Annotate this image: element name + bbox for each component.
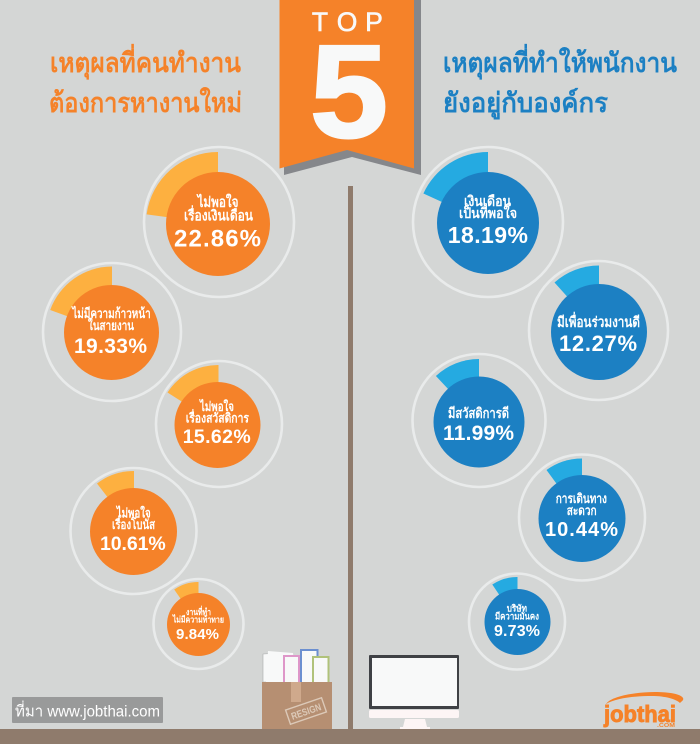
left stat 1: salary 22.86% [144,147,294,297]
right stat 1: satisfying salary 18.19%: เป็นที่พอใจ [459,203,517,221]
right stat 4: convenient commute 10.44%: 10.44% [545,519,618,541]
right stat 1: satisfying salary 18.19% [413,147,563,297]
right stat 4: convenient commute 10.44%: สะดวก [567,503,597,518]
left stat 3: welfare 15.62% [156,361,282,487]
left stat 1: salary 22.86%: 22.86% [174,226,261,252]
left stat 3: welfare 15.62%: ไม่พอใจ [199,398,234,414]
banner word TOP [312,7,383,37]
right stat 5: stable company 9.73% [469,574,565,670]
left stat 4: bonus 10.61%: ไม่พอใจ [115,505,151,521]
banner word TOP: O [337,7,357,37]
icon: resignation box: RESIGN [290,702,323,723]
ground strip [0,729,700,744]
logo: jobthai [603,692,683,729]
left stat 4: bonus 10.61%: 10.61% [100,533,166,555]
source label [12,697,163,723]
right stat 3: good welfare 11.99% [412,354,546,487]
right stat 4: convenient commute 10.44% [519,454,645,580]
left stat 5: unchallenging work 9.84%: ไม่มีความท้าทาย [172,614,224,625]
left stat 3: welfare 15.62%: 15.62% [183,426,251,448]
left stat 5: unchallenging work 9.84%: งานที่ทำ [186,605,211,617]
banner word TOP: T [312,7,328,37]
right stat 2: good colleagues 12.27%: 12.27% [559,331,637,356]
right stat 2: good colleagues 12.27%: มีเพื่อนร่วมงานดี [557,311,640,331]
left stat 2: career path 19.33%: ในสายงาน [88,317,135,333]
left heading: ต้องการหางานใหม่ [49,87,242,118]
left stat 2: career path 19.33%: 19.33% [74,335,147,358]
right heading: เหตุผลที่ทำให้พนักงาน [443,43,677,80]
icon: desktop monitor [369,655,459,729]
right stat 4: convenient commute 10.44%: การเดินทาง [556,491,607,506]
left stat 5: unchallenging work 9.84% [154,579,244,669]
left stat 4: bonus 10.61%: เรื่องโบนัส [112,515,155,532]
left stat 5: unchallenging work 9.84%: 9.84% [176,626,219,643]
right stat 3: good welfare 11.99%: 11.99% [443,422,514,445]
left heading [49,43,242,118]
left heading: เหตุผลที่คนทำงาน [50,43,241,80]
right stat 2: good colleagues 12.27% [529,261,668,400]
right stat 3: good welfare 11.99%: มีสวัสดิการดี [448,405,509,421]
banner word TOP: P [365,7,383,37]
banner numeral 5: 5 [310,18,388,165]
right stat 5: stable company 9.73%: บริษัท [507,604,527,615]
right stat 1: satisfying salary 18.19%: เงินเดือน [464,193,511,209]
right stat 1: satisfying salary 18.19%: 18.19% [448,222,528,248]
left stat 1: salary 22.86%: เรื่องเงินเดือน [184,204,253,224]
left stat 2: career path 19.33%: ไม่มีความก้าวหน้า [71,305,151,321]
center divider pole [348,186,353,731]
right heading [443,43,677,120]
left stat 3: welfare 15.62%: เรื่องสวัสดิการ [186,408,249,426]
source label: ที่มา www.jobthai.com [15,700,160,720]
right stat 5: stable company 9.73%: 9.73% [494,623,540,640]
icon: resignation box [262,650,332,729]
left stat 4: bonus 10.61% [70,468,196,594]
left stat 2: career path 19.33% [43,263,181,401]
logo: jobthai: .COM [657,723,676,729]
right stat 5: stable company 9.73%: มีความมั่นคง [495,608,539,622]
logo: jobthai: jobthai [603,701,676,727]
top 5 banner [280,0,421,175]
right heading: ยังอยู่กับองค์กร [443,87,608,120]
left stat 1: salary 22.86%: ไม่พอใจ [196,193,238,211]
